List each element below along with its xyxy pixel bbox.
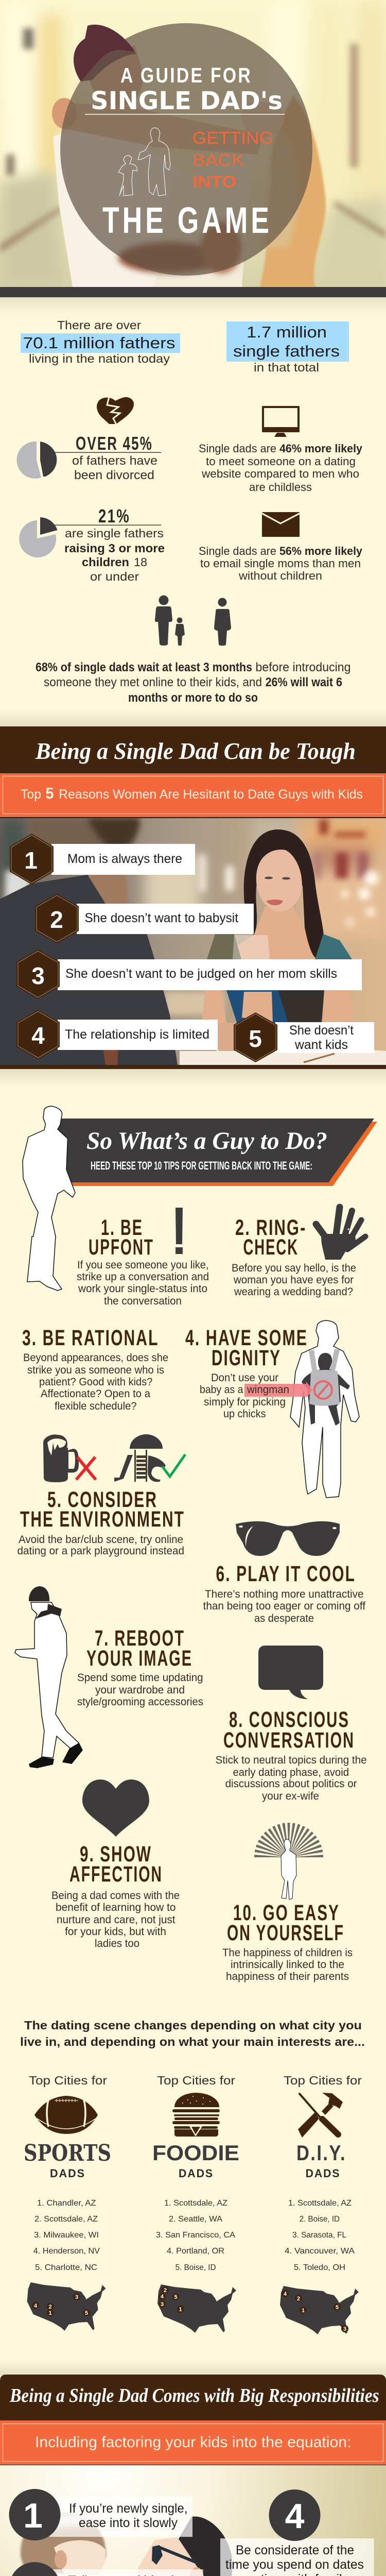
stat: 68 percent wait: before introducing [255,660,351,674]
column: foodie dads: DADS [179,2167,214,2180]
stat: 46 percent more likely: to meet someone on a dating [206,455,356,468]
map: foodie dads cities: 4 [161,2294,164,2300]
tip 1: be upfront [77,1208,209,1307]
reason 1 [10,834,195,885]
step 4 [220,2489,374,2576]
tip 7: reboot your image: 7. REBOOT [95,1626,185,1651]
reason 4: The relationship is limited [65,1027,209,1042]
stat: 1.7 million single fathers: in that total [254,361,319,374]
column: foodie dads [152,2074,239,2333]
photo of couple on a date [0,818,386,1065]
tip 2: ring-check: wearing a wedding band? [234,1286,353,1298]
column: diy dads: D.I.Y. [296,2141,346,2165]
title line: Single Dad's: SINGLE DAD's [91,87,283,115]
column: foodie dads: FOODIE [152,2141,239,2165]
man's face [86,45,143,107]
map: sports dads cities: 2 [49,2304,52,2310]
man's shirt [53,130,184,287]
tip 7: reboot your image: your wardrobe and [95,1684,185,1696]
map: sports dads cities: 4 [34,2303,38,2309]
icon: broken heart [97,397,134,425]
hair over circle edge [74,25,135,81]
stat: 46 percent more likely: Single dads are [199,442,276,455]
tip 3: be rational: flexible schedule? [55,1400,137,1412]
column: diy dads: 1. Scottsdale, AZ [288,2199,352,2208]
map: diy dads cities: 5 [336,2304,339,2311]
stat: over 45 percent divorced: of fathers have [72,454,157,468]
tip 1: be upfront: 1. BE [101,1215,143,1240]
number circle 2 [9,2562,61,2576]
tip 10: go easy on yourself [222,1837,353,1982]
stat: 21 percent raising 3 or more: children [82,555,129,569]
step 4: Be considerate of the [236,2543,354,2557]
map: foodie dads cities: 5 [174,2294,178,2300]
reason 3: She doesn’t want to be judged on her mom skills [65,967,337,981]
heading banner: Being a Single Dad Can be Tough [35,738,356,764]
map: diy dads cities [280,2286,359,2334]
stat: 70.1 million fathers: 70.1 million fathers [23,334,175,352]
stat: 56 percent more likely: without children [238,569,322,582]
step 1: If you’re newly single, [69,2501,187,2516]
panel: top cities [20,2019,365,2334]
tip 2: ring-check: Before you say hello, is the [232,1262,356,1274]
number circle 1: 1 [23,2496,43,2535]
tip 3: be rational [22,1326,168,1412]
stat: 21 percent raising 3 or more: raising 3 or more [64,541,165,555]
hexagon badge 4 [16,1010,60,1059]
tip 5: consider the environment: Avoid the bar/club scene, try online [19,1534,183,1546]
tip 9: show affection: benefit of learning how to [56,1902,176,1913]
stat: 1.7 million single fathers: single fathers [233,342,340,360]
column: sports dads: 2. Scottsdale, AZ [34,2215,98,2224]
circle overlay [60,23,312,276]
stat: 56 percent more likely: to email single moms than men [200,557,361,570]
tip 5: consider the environment [17,1487,185,1557]
hexagon badge 1: 1 [24,847,38,874]
tip 4: have some dignity [185,1320,359,1498]
tip 2: ring-check: CHECK [243,1235,299,1260]
tips banner [57,1118,377,1186]
heading banner [0,2375,386,2420]
stat: 21 percent raising 3 or more: or under [90,570,139,583]
icon: speech bubble [258,1646,323,1699]
icon: hand with ring [316,1207,365,1260]
intro text [20,2019,365,2048]
number circle 4: 4 [285,2497,305,2536]
tip 4: have some dignity: DIGNITY [212,1346,281,1370]
tip 4: have some dignity: wingman [247,1384,289,1396]
column: sports dads: 5. Charlotte, NC [35,2263,97,2272]
tip 4: have some dignity: 4. HAVE SOME [185,1326,308,1350]
tip 10: go easy on yourself: intrinsically linked to the [231,1959,344,1971]
stat: 56 percent more likely [199,545,363,582]
map: sports dads cities: 3 [75,2294,78,2300]
stat: 68 percent wait: months or more to do so [128,691,258,705]
column: sports dads: 4. Henderson, NV [33,2247,100,2256]
column: foodie dads: 1. Scottsdale, AZ [164,2199,227,2208]
reason 3 [16,950,362,999]
icon: playground with green check [114,1434,185,1482]
column: diy dads: DADS [306,2167,341,2180]
hexagon badge 1 [10,834,54,885]
woman's face [256,850,302,911]
number circle 4 [269,2489,320,2541]
intro text: The dating scene changes depending on what city you [24,2019,362,2032]
title line: Back: BACK [192,150,244,170]
callout arrow: wingman highlight [244,1382,313,1398]
table and hands [180,1049,386,1065]
icon: burger [172,2093,220,2137]
hexagon badge 2: 2 [50,906,63,933]
tip 4: have some dignity: up chicks [223,1408,266,1420]
sunglasses [152,2545,198,2565]
stat: 70.1 million fathers: living in the nation today [29,352,170,365]
tip 8: conscious conversation: early dating phase, avoid [233,1767,349,1778]
tip 5: consider the environment: 5. CONSIDER [47,1487,157,1512]
hexagon badge 4: 4 [31,1022,45,1049]
stat: 70.1 million fathers: There are over [57,318,141,332]
tip 2: ring-check [232,1207,365,1298]
hexagon badge 3 [16,950,60,999]
icon: no symbol [314,1381,332,1399]
tip 10: go easy on yourself: 10. GO EASY [233,1901,340,1925]
title line: Into: INTO [192,172,236,191]
tip 8: conscious conversation: discussions about politics or [225,1778,357,1790]
subheading band: Including factoring your kids into the equation: [35,2434,351,2451]
tip 9: show affection: nurture and care, not just [57,1914,176,1926]
title line: Getting: GETTING [192,128,273,147]
map: sports dads cities: 5 [85,2310,88,2316]
icon: beer mug with red X [43,1434,96,1482]
icon: man in hat and scarf [15,1586,82,1768]
stat: 1.7 million single fathers [226,321,349,374]
stat: 21 percent raising 3 or more: 21% [98,505,130,527]
stat: 46 percent more likely [199,442,363,494]
icon: football [34,2096,98,2134]
pie chart: 21 percent [19,517,58,557]
title line: A Guide For: A GUIDE FOR [120,63,252,87]
map: foodie dads cities: 1 [179,2307,182,2313]
heading banner [0,726,386,773]
title line: The Game: THE GAME [102,200,272,241]
stat: 68 percent wait: 26% will wait 6 [266,675,342,689]
tips banner: So What’s a Guy to Do? [86,1127,327,1155]
column: foodie dads: 3. San Francisco, CA [156,2231,235,2240]
stat: 21 percent raising 3 or more [19,505,165,583]
column: diy dads: 5. Toledo, OH [294,2263,345,2272]
tip 3: be rational: strike you as someone who is [27,1364,164,1376]
column: sports dads: 3. Milwaukee, WI [34,2231,99,2240]
reason 5: want kids [294,1038,348,1052]
woman's hair [244,829,324,959]
stat: over 45 percent divorced: OVER 45% [76,433,153,454]
stat: 68 percent wait [36,660,351,705]
icon: envelope [261,512,300,537]
reason 2: She doesn’t want to babysit [84,911,238,925]
tip 6: play it cool: There’s nothing more unattractive [205,1588,363,1600]
stat: 1.7 million single fathers: 1.7 million [247,323,327,341]
man's neck [85,875,129,904]
column: foodie dads: 2. Seattle, WA [169,2215,222,2224]
icon: man with baby carrier [290,1320,359,1498]
stat: 56 percent more likely: Single dads are [199,545,276,557]
photo of father carrying son [0,2465,386,2576]
map: sports dads cities: 1 [49,2310,52,2316]
tip 1: be upfront: If you see someone you like, [77,1259,209,1271]
number circle 1 [9,2489,61,2540]
stat: 68 percent wait: 68% of single dads wait at least 3 months [36,660,252,674]
tip 2: ring-check: 2. RING- [235,1215,307,1240]
subheading band [0,2420,386,2466]
panel: tips [15,1106,377,1982]
tip 10: go easy on yourself: happiness of their parents [226,1971,349,1982]
map: foodie dads cities [157,2284,236,2333]
tip 5: consider the environment: dating or a park playground instead [17,1545,184,1557]
subheading band: 5 [45,784,54,802]
tip 7: reboot your image: YOUR IMAGE [86,1646,192,1671]
panel: being a single dad can be tough [0,726,386,1065]
map: diy dads cities: 3 [343,2326,346,2332]
shading above banner [0,709,386,726]
tip 9: show affection: Being a dad comes with the [51,1890,180,1902]
tip 5: consider the environment: THE ENVIRONMENT [20,1507,185,1532]
tip 4: have some dignity: Don’t use your [211,1372,278,1384]
column: diy dads: Top Cities for [284,2074,362,2087]
tip 1: be upfront: the conversation [104,1295,182,1307]
stat: 70.1 million fathers [21,318,180,365]
tip 7: reboot your image: style/grooming accessories [77,1696,203,1708]
panel: hero title [0,0,386,287]
stat: 21 percent raising 3 or more: 18 [134,555,147,569]
tip 1: be upfront: work your single-status into [78,1283,207,1295]
icon: computer monitor [262,406,300,437]
tip 9: show affection: for your kids, but with [65,1926,166,1938]
blonde hair [260,95,326,287]
tip 6: play it cool [203,1521,365,1624]
woman's patterned dress [207,934,241,959]
icon: heart [82,1780,149,1837]
icon: walking man silhouette [23,1106,75,1291]
column: foodie dads: 4. Portland, OR [167,2247,224,2256]
pie chart: 45 percent [16,442,57,479]
tip 9: show affection [51,1780,180,1950]
reason 2 [35,894,254,943]
column: sports dads: DADS [50,2167,85,2180]
map: foodie dads cities: 3 [161,2301,164,2308]
hero photo of embracing couple [0,0,386,287]
map: diy dads cities: 2 [297,2296,300,2302]
tip 7: reboot your image: Spend some time updating [77,1672,203,1684]
hexagon badge 2 [35,894,79,943]
icon: man, child and woman [155,596,231,646]
brown divider bar [0,1065,386,1069]
tip 1: be upfront: strike up a conversation and [77,1271,209,1283]
stat: 46 percent more likely: are childless [249,481,312,494]
panel: big responsibilities [0,2375,386,2576]
woman's skin [241,102,284,138]
icon: father and child outline [118,128,170,196]
stat: 56 percent more likely: 56% more likely [279,545,363,557]
reason 5: She doesn’t [289,1023,354,1038]
tip 9: show affection: 9. SHOW [80,1842,152,1867]
tip 9: show affection: AFFECTION [69,1862,163,1887]
hexagon badge 5: 5 [249,1025,262,1052]
reason 1: Mom is always there [67,852,182,866]
column: sports dads: SPORTS [24,2140,111,2166]
woman's skin: chest and arms [202,907,355,1023]
shading above second banner [0,2360,386,2375]
icon: hammer and screwdriver [298,2093,343,2138]
icon: exclamation mark [176,1208,183,1254]
icon: sunglasses [236,1521,340,1556]
step 4: time you spend on dates [225,2557,364,2572]
top shading [0,297,386,315]
map: diy dads cities: 1 [302,2308,305,2314]
column: sports dads [24,2074,111,2331]
man's hair [74,38,136,81]
step 2 [9,2562,203,2576]
column: foodie dads: 5. Boise, ID [176,2263,216,2272]
tip 8: conscious conversation [215,1646,367,1802]
panel: father statistics [16,318,363,705]
tip 3: be rational: Affectionate? Open to a [41,1388,150,1400]
intro text: live in, and depending on what your main interests are... [20,2035,365,2048]
stat: 46 percent more likely: website compared to men who [201,467,359,480]
tip 9: show affection: ladies too [95,1938,139,1950]
shading under bar [0,1069,386,1088]
stat: 68 percent wait: someone they met online to their kids, and [44,675,262,689]
tip 3: be rational: 3. BE RATIONAL [22,1326,159,1350]
stat: over 45 percent divorced [16,433,161,482]
map: foodie dads cities: 2 [164,2287,167,2294]
subheading band: Reasons Women Are Hesitant to Date Guys with Kids [59,787,363,802]
boy's head [21,2513,106,2576]
column: diy dads: 2. Boise, ID [300,2215,340,2224]
step 1: ease into it slowly [79,2516,178,2530]
tip 4: have some dignity: baby as a [200,1384,243,1396]
reason 5 [234,1012,374,1062]
column: foodie dads: Top Cities for [157,2074,235,2087]
map: sports dads cities [27,2282,106,2331]
man's jacket [0,875,178,1065]
column: diy dads [280,2074,362,2334]
tip 3: be rational: patient? Good with kids? [39,1376,152,1388]
column: sports dads: Top Cities for [29,2074,107,2087]
column: sports dads: 1. Chandler, AZ [37,2199,96,2208]
tip 3: be rational: Beyond appearances, does she [23,1352,168,1364]
stat: 46 percent more likely: 46% more likely [279,442,363,455]
column: diy dads: 3. Sarasota, FL [292,2231,346,2240]
stat: 21 percent raising 3 or more: are single fathers [65,527,164,540]
tip 6: play it cool: than being too eager or coming off [203,1600,365,1612]
column: diy dads: 4. Vancouver, WA [285,2247,355,2256]
reason 4 [16,1010,218,1059]
stat: over 45 percent divorced: been divorced [74,468,154,482]
icon: man with sunburst [269,1837,309,1900]
subheading band [0,773,386,818]
tip 4: have some dignity: simply for picking [204,1396,286,1408]
map: diy dads cities: 4 [284,2291,287,2297]
man's hair [29,818,142,845]
tip 8: conscious conversation: your ex-wife [262,1790,319,1802]
hexagon badge 5 [234,1012,277,1062]
tip 2: ring-check: woman you have eyes for [233,1274,354,1286]
tip 1: be upfront: UPFONT [89,1235,154,1260]
tip 8: conscious conversation: Stick to neutral topics during the [215,1754,367,1766]
tip 6: play it cool: as desperate [254,1613,314,1624]
dark divider bar [0,287,386,297]
step 1 [9,2489,192,2540]
tip 7: reboot your image [15,1586,203,1768]
dad's head [175,2516,232,2576]
tip 10: go easy on yourself: The happiness of children is [222,1947,353,1959]
subheading band: Top [21,787,41,802]
woman's top [154,191,249,287]
wine glass [233,935,270,959]
hexagon badge 3: 3 [31,962,45,989]
